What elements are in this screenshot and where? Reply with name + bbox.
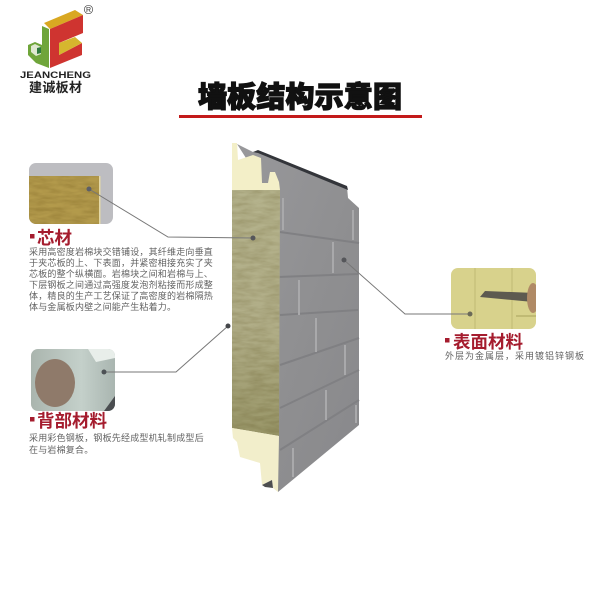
description: core: 体，精良的生产工艺保证了高密度的岩棉隔热 — [29, 290, 213, 301]
face brick seams — [278, 198, 359, 477]
description: core: 下层钢板之间通过高强度发泡剂粘接而形成整 — [29, 279, 213, 290]
title underline — [179, 115, 422, 118]
title — [179, 74, 422, 118]
description: back: 采用彩色钢板，钢板先经成型机轧制成型后 — [29, 432, 204, 443]
description: core: 采用高密度岩棉块交错铺设，其纤维走向垂直 — [29, 246, 213, 257]
callout line: back — [102, 324, 230, 374]
panel: back material — [29, 349, 207, 455]
heading: surface: 表面材料 — [453, 332, 523, 352]
logo: JEANCHENG — [20, 5, 93, 95]
rock wool core — [232, 190, 280, 436]
brand name: JEANCHENG — [20, 70, 91, 81]
logo mark — [28, 10, 83, 68]
description: core: 芯板的整个纵横面。岩棉块之间和岩棉与上、 — [29, 268, 213, 279]
heading: core: 芯材 — [37, 228, 72, 248]
callout line: core — [86, 186, 256, 240]
foam bottom — [232, 428, 279, 492]
panel: core material — [29, 163, 216, 312]
brand name chinese: 建诚板材 — [29, 80, 82, 95]
heading: back: 背部材料 — [37, 411, 107, 431]
description: core: 体与金属板内壁之间能产生粘着力。 — [29, 301, 176, 312]
description: back: 在与岩棉复合。 — [29, 444, 93, 455]
panel: wall panel cross section — [232, 143, 359, 492]
panel: surface material — [445, 268, 585, 361]
title text: 墙板结构示意图 — [198, 74, 402, 116]
description: core: 于夹芯板的上、下表面，并紧密相接充实了夹 — [29, 257, 213, 268]
photo: steel coil — [31, 349, 115, 411]
top dark edge — [253, 150, 348, 190]
gray metal face and flange — [237, 144, 359, 492]
photo: surface and blade — [451, 268, 539, 329]
foam top — [232, 143, 280, 191]
registered mark: R — [86, 7, 91, 14]
photo: rock wool — [29, 163, 113, 224]
description: surface: 外层为金属层，采用镀铝锌钢板 — [445, 350, 585, 361]
bottom tongue shadow — [262, 480, 273, 488]
callout line: surface — [342, 258, 472, 316]
